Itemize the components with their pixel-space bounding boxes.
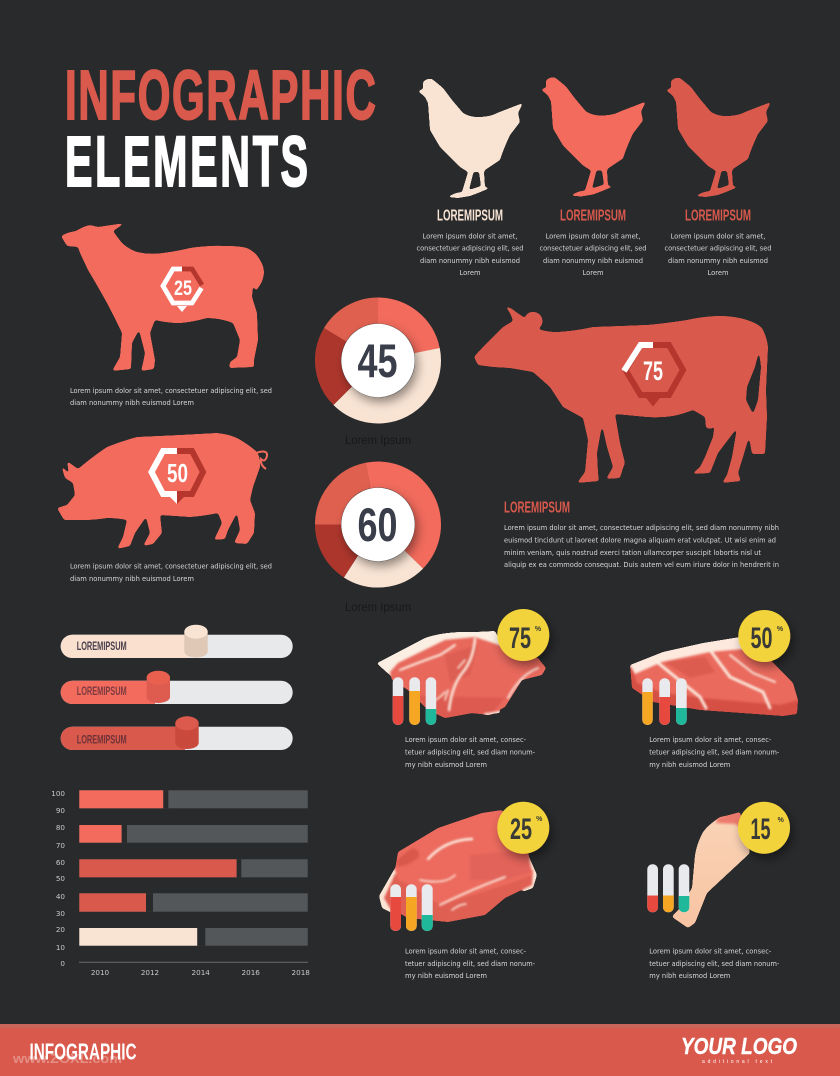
- percentage badge: %: [778, 817, 785, 824]
- icon: red hen: [666, 78, 771, 197]
- hen 3 caption: [664, 208, 772, 277]
- percentage badge: %: [535, 626, 542, 633]
- panel: meat 50: [630, 610, 798, 769]
- panel: meat 25: [379, 802, 549, 980]
- y axis labels: 10: [56, 943, 65, 952]
- cow heading and text: aliquip ex ea commodo consequat. Duis autem vel eum iriure dolor in hendrerit in: [504, 560, 779, 569]
- badge: 25 hexagon: [163, 269, 202, 312]
- cow heading and text: minim veniam, quis nostrud exerci tation ullamcorper suscipit lobortis nisl ut: [504, 548, 761, 557]
- logo: YOUR LOGO: [681, 1033, 797, 1059]
- panel: cow: [474, 306, 779, 569]
- icon: sheep silhouette: [61, 223, 264, 371]
- hen 2 caption: Lorem ipsum dolor sit amet,: [546, 232, 640, 240]
- slider 3: [61, 716, 293, 750]
- y axis labels: 70: [56, 841, 65, 850]
- hen 3 caption: consectetuer adipiscing elit, sed: [664, 244, 772, 252]
- donut chart: 45: [307, 290, 449, 447]
- caption: tetuer adipiscing elit, sed diam nonum-: [405, 959, 535, 968]
- hen 3 caption: LOREMIPSUM: [685, 208, 751, 224]
- caption: tetuer adipiscing elit, sed diam nonum-: [405, 748, 535, 756]
- caption: Lorem ipsum dolor sit amet, consec-: [649, 735, 772, 744]
- sheep caption: diam nonummy nibh euismod Lorem: [70, 398, 194, 407]
- slider 1: [61, 625, 293, 658]
- percentage badge: [497, 802, 549, 854]
- footer title: INFOGRAPHIC: [30, 1038, 136, 1064]
- caption: Lorem ipsum dolor sit amet, consec-: [649, 946, 772, 956]
- panel: meat 75: [377, 609, 549, 769]
- caption: my nibh euismod Lorem: [649, 760, 730, 769]
- icon: cow silhouette: [474, 306, 768, 483]
- y axis labels: 40: [56, 892, 65, 901]
- sheep caption: Lorem ipsum dolor sit amet, consectetuer adipiscing elit, sed: [70, 386, 272, 395]
- hen 1 caption: diam nonummy nibh euismod: [420, 256, 520, 265]
- hen 1 caption: consectetuer adipiscing elit, sed: [416, 244, 524, 252]
- pig caption: diam nonummy nibh euismod Lorem: [70, 574, 194, 583]
- y axis labels: 50: [56, 874, 65, 883]
- caption: [405, 946, 535, 980]
- test tubes: [390, 884, 433, 931]
- x axis labels: 2016: [242, 968, 260, 977]
- test tubes: [647, 864, 689, 912]
- y axis labels: [51, 789, 65, 968]
- donut chart: 45: 45: [358, 334, 398, 387]
- illustration: t-bone steak: [630, 637, 798, 716]
- hen 1 caption: LOREMIPSUM: [437, 208, 503, 224]
- cow heading and text: euismod tincidunt ut laoreet dolore magna aliquam erat volutpat. Ut wisi enim ad: [504, 536, 776, 544]
- caption: [405, 735, 535, 769]
- hen 3 caption: Lorem ipsum dolor sit amet,: [670, 232, 766, 240]
- donut chart: 60: Lorem Ipsum: [345, 602, 411, 614]
- caption: Lorem ipsum dolor sit amet, consec-: [405, 946, 526, 956]
- title: [65, 57, 376, 202]
- percentage badge: %: [536, 816, 543, 823]
- bar 4: [79, 893, 308, 912]
- y axis labels: 60: [56, 858, 65, 867]
- percentage badge: [497, 609, 549, 661]
- hen 1 caption: Lorem: [460, 268, 480, 277]
- caption: my nibh euismod Lorem: [405, 760, 487, 769]
- bar 1: [79, 790, 308, 808]
- badge: 50 hexagon: [152, 451, 203, 504]
- donut chart: 60: [307, 454, 449, 614]
- hen 2 caption: [540, 208, 646, 277]
- illustration: marbled steak: [377, 631, 546, 718]
- icon: pig silhouette: [57, 433, 267, 549]
- hen 1 caption: Lorem ipsum dolor sit amet,: [422, 232, 518, 240]
- hen 2 caption: diam nonummy nibh euismod: [543, 256, 643, 265]
- y axis labels: 20: [56, 925, 65, 934]
- percentage badge: 25: [510, 813, 532, 846]
- bar chart: [51, 789, 310, 977]
- cow heading and text: [504, 500, 779, 569]
- panel: hens: [416, 77, 772, 277]
- percentage badge: 50: [750, 622, 772, 655]
- percentage badge: [738, 802, 790, 854]
- cow heading and text: Lorem ipsum dolor sit amet, consectetuer adipiscing elit, sed diam nonummy nibh: [504, 523, 779, 532]
- bar 3: [79, 859, 308, 877]
- caption: my nibh euismod Lorem: [649, 971, 730, 980]
- logo: additional text: [702, 1059, 773, 1065]
- percentage badge: 15: [750, 813, 770, 846]
- caption: [649, 735, 780, 769]
- title: INFOGRAPHIC: [65, 57, 376, 135]
- panel: pig: [57, 433, 272, 583]
- pig caption: Lorem ipsum dolor sit amet, consectetuer adipiscing elit, sed: [70, 562, 272, 570]
- percentage badge: [738, 610, 790, 662]
- cow heading and text: LOREMIPSUM: [504, 500, 570, 516]
- percentage badge: 75: [509, 622, 531, 655]
- badge: 50 hexagon: 50: [167, 458, 188, 488]
- x axis labels: 2012: [141, 968, 159, 977]
- footer band: [0, 1024, 840, 1076]
- donut chart: 60: 60: [358, 498, 398, 551]
- bar 5: [79, 928, 308, 946]
- caption: [649, 946, 780, 980]
- caption: Lorem ipsum dolor sit amet, consec-: [405, 735, 526, 744]
- hen 2 caption: LOREMIPSUM: [560, 208, 626, 224]
- hen 2 caption: Lorem: [582, 268, 604, 277]
- sheep caption: [70, 386, 272, 407]
- y axis labels: 0: [60, 959, 65, 968]
- title: ELEMENTS: [65, 122, 308, 202]
- bar 2: [79, 825, 308, 843]
- caption: my nibh euismod Lorem: [405, 971, 487, 980]
- donut chart: 45: Lorem Ipsum: [345, 435, 411, 447]
- y axis labels: 30: [56, 909, 65, 918]
- y axis labels: 100: [51, 789, 65, 798]
- test tubes: [393, 677, 436, 725]
- x axis labels: 2014: [192, 968, 210, 977]
- hen 3 caption: diam nonummy nibh euismod: [668, 256, 768, 265]
- slider 2: LOREMIPSUM: [77, 684, 127, 698]
- caption: tetuer adipiscing elit, sed diam nonum-: [649, 959, 780, 968]
- hen 2 caption: consectetuer adipiscing elit, sed: [540, 244, 646, 252]
- y axis labels: 80: [56, 823, 65, 832]
- icon: cream hen: [418, 79, 523, 198]
- badge: 75 hexagon: [624, 345, 683, 406]
- slider 2: [61, 671, 293, 704]
- illustration: beef roast: [379, 810, 537, 922]
- x axis labels: [91, 968, 310, 977]
- slider 3: LOREMIPSUM: [77, 732, 127, 746]
- badge: 75 hexagon: 75: [643, 356, 663, 386]
- badge: 25 hexagon: 25: [174, 277, 192, 300]
- test tubes: [642, 678, 687, 725]
- slider 1: LOREMIPSUM: [77, 639, 127, 653]
- panel: sheep: [61, 223, 272, 407]
- illustration: chicken drumstick: [672, 812, 750, 928]
- caption: tetuer adipiscing elit, sed diam nonum-: [649, 748, 780, 756]
- percentage badge: %: [777, 626, 784, 633]
- pig caption: [70, 562, 272, 583]
- logo: [681, 1033, 797, 1065]
- icon: coral hen: [541, 77, 646, 196]
- panel: sliders: [61, 625, 293, 750]
- watermark: www.ZOXL.com: [12, 1051, 122, 1066]
- panel: meat 15: [647, 802, 790, 980]
- hen 3 caption: Lorem: [708, 268, 728, 277]
- x axis labels: 2010: [91, 968, 110, 977]
- y axis labels: 90: [56, 806, 65, 815]
- x axis labels: 2018: [292, 968, 310, 977]
- hen 1 caption: [416, 208, 524, 277]
